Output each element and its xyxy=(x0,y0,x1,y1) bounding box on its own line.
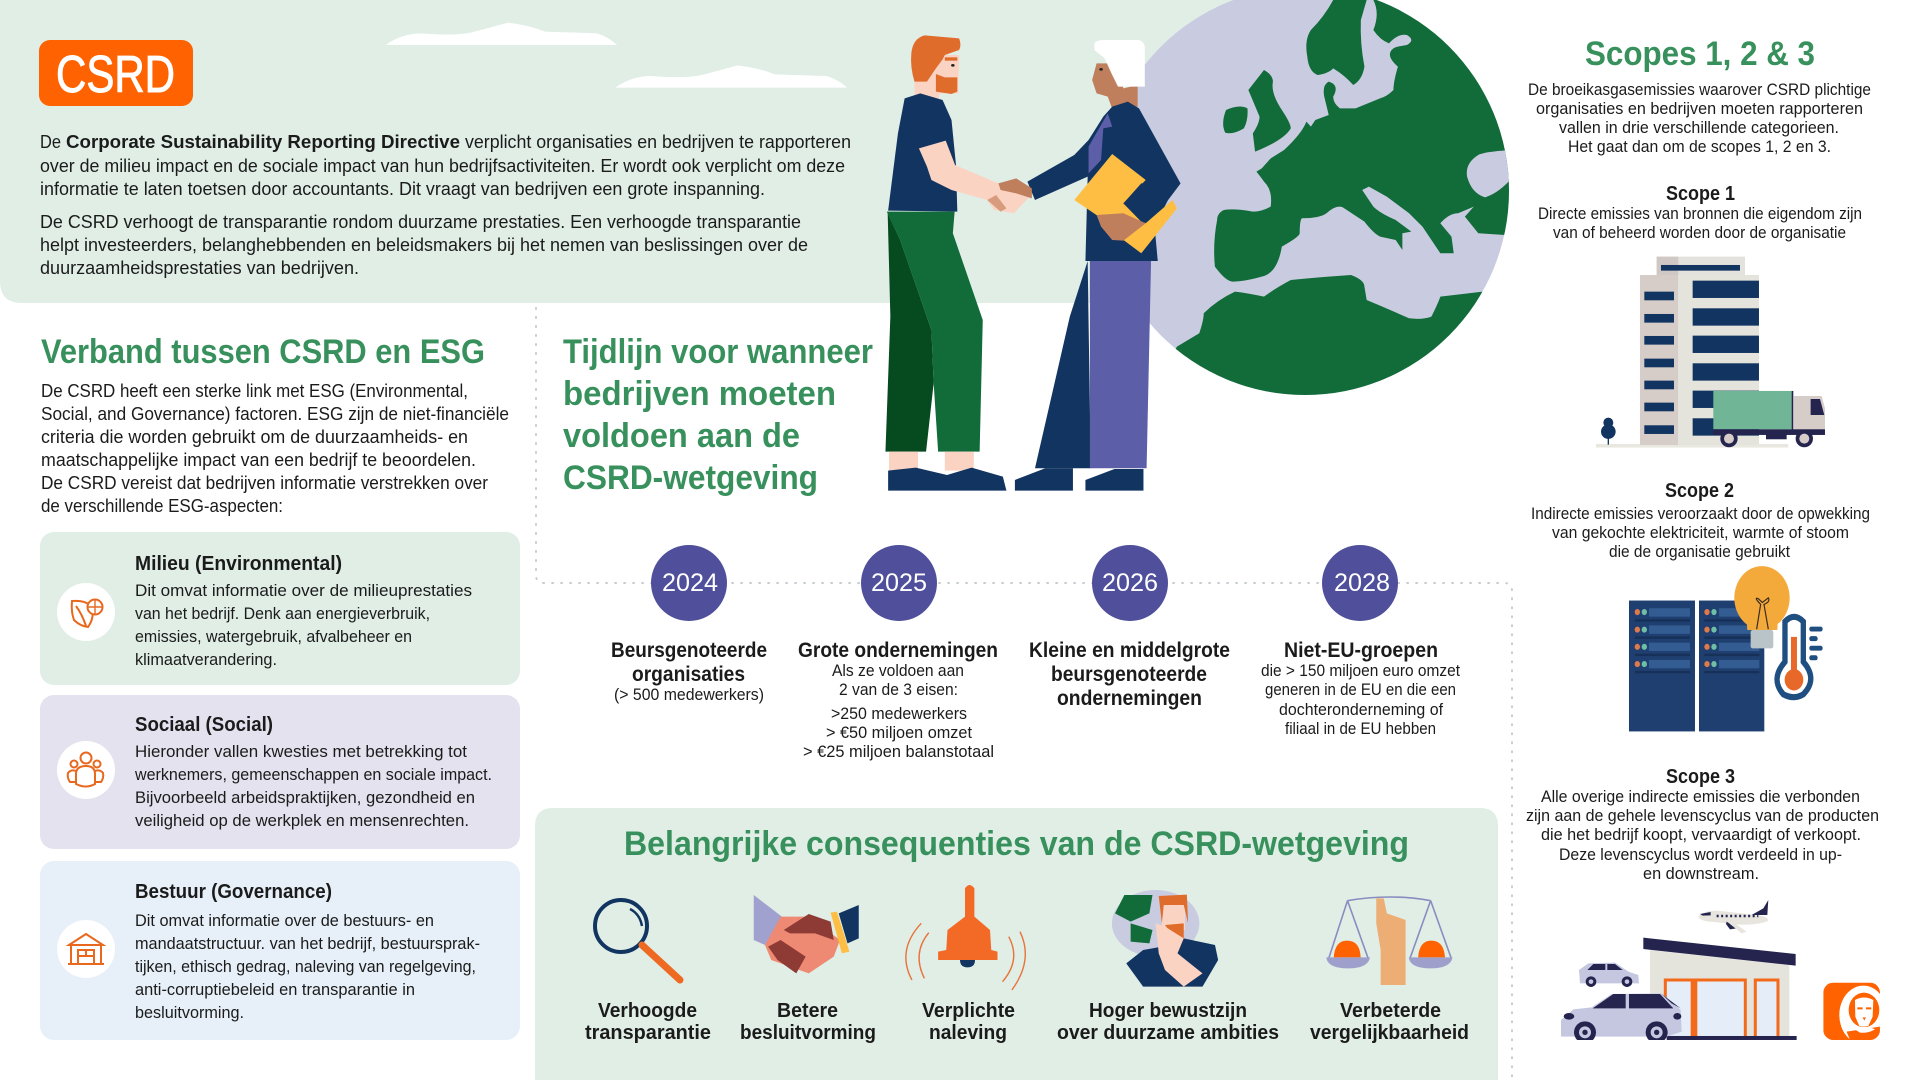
timeline item: 2026: Kleine en middelgrote xyxy=(1029,639,1230,662)
illustration: woman with folder xyxy=(987,40,1181,491)
text block: Scope 3: Deze levenscyclus wordt verdeeld in up- xyxy=(1559,846,1842,864)
timeline item: 2025: Grote ondernemingen xyxy=(798,639,998,662)
illustration: servers, bulb, thermometer xyxy=(1629,566,1823,731)
heading: Tijdlijn: CSRD-wetgeving xyxy=(563,459,818,497)
text block: scopes intro xyxy=(1528,81,1871,156)
timeline item: 2024: 2024 xyxy=(662,569,718,597)
text block: intro: duurzaamheidsprestaties van bedrijven. xyxy=(40,257,359,278)
panel: Milieu: Milieu (Environmental) xyxy=(135,553,342,575)
text block: intro: helpt investeerders, belanghebbenden en beleidsmakers bij het nemen van beslissingen over de xyxy=(40,234,808,255)
text block: scopes intro: organisaties en bedrijven moeten rapporteren xyxy=(1536,100,1863,118)
timeline item: 2026: ondernemingen xyxy=(1057,687,1202,710)
text block: Scope 3: en downstream. xyxy=(1643,865,1759,883)
illustration: building, cars and plane xyxy=(1561,900,1797,1043)
panel: Milieu: emissies, watergebruik, afvalbeheer en xyxy=(135,628,412,646)
timeline item: 2025: > €50 miljoen omzet xyxy=(826,724,972,742)
panel: Sociaal: Hieronder vallen kwesties met betrekking tot xyxy=(135,743,467,761)
timeline item: 2025: >250 medewerkers xyxy=(831,705,967,723)
text block: intro: De xyxy=(40,131,61,152)
label: Betere besluitvorming: besluitvorming xyxy=(740,1022,876,1044)
text block: Scope 3: Scope 3 xyxy=(1666,766,1735,788)
panel: Milieu: klimaatverandering. xyxy=(135,651,277,669)
text block: scopes intro: vallen in drie verschillende categorieen. xyxy=(1559,119,1839,137)
text block: Scope 1 xyxy=(1538,183,1862,242)
timeline item: 2025: > €25 miljoen balanstotaal xyxy=(803,743,994,761)
timeline item: 2024: (> 500 medewerkers) xyxy=(614,686,764,704)
text block: intro: De CSRD verhoogt de transparantie rondom duurzame prestaties. Een verhoogde transparantie xyxy=(40,211,801,232)
text block: Scope 2 xyxy=(1531,480,1870,561)
badge: CSRD: CSRD xyxy=(56,46,175,104)
panel: Sociaal: Bijvoorbeeld arbeidspraktijken, gezondheid en xyxy=(135,789,475,807)
illustration: man xyxy=(885,35,1030,491)
text block: ESG intro: maatschappelijke impact van een bedrijf te beoordelen. xyxy=(41,449,476,470)
logo: ING lion xyxy=(1823,982,1880,1040)
panel: Milieu: Dit omvat informatie over de milieuprestaties xyxy=(135,582,472,600)
timeline item: 2028: Niet-EU-groepen xyxy=(1284,639,1438,662)
timeline item: 2028: die > 150 miljoen euro omzet xyxy=(1261,662,1460,680)
text block: Scope 2: van gekochte elektriciteit, warmte of stoom xyxy=(1552,524,1849,542)
panel: Bestuur: mandaatstructuur. van het bedrijf, bestuursprak- xyxy=(135,935,480,953)
text block: intro: Corporate Sustainability Reporting Directive xyxy=(66,131,460,152)
text block: ESG intro: criteria die worden gebruikt om de duurzaamheids- en xyxy=(41,426,468,447)
panel: Sociaal: veiligheid op de werkplek en mensenrechten. xyxy=(135,812,469,830)
icon: bell xyxy=(906,885,1025,990)
icon: magnifying glass xyxy=(595,900,680,980)
label: Verbeterde vergelijkbaarheid: Verbeterde xyxy=(1340,1000,1441,1022)
icon: people xyxy=(57,741,115,799)
label: Verbeterde vergelijkbaarheid: vergelijkbaarheid xyxy=(1310,1022,1469,1044)
illustration: globe xyxy=(1130,0,1509,395)
text block: ESG intro xyxy=(41,380,509,516)
icon: handshake xyxy=(754,895,859,973)
label: Verplichte naleving xyxy=(922,1000,1015,1044)
timeline item: 2024 xyxy=(611,545,767,704)
illustration: office and truck xyxy=(1596,257,1825,448)
panel: Bestuur: Bestuur (Governance) xyxy=(135,881,332,903)
label: Betere besluitvorming: Betere xyxy=(777,1000,838,1022)
timeline item: 2024: Beursgenoteerde xyxy=(611,639,767,662)
text block: Scope 1: Scope 1 xyxy=(1666,183,1735,205)
label: Verhoogde transparantie: Verhoogde xyxy=(598,1000,697,1022)
text block: Scope 2: Indirecte emissies veroorzaakt door de opwekking xyxy=(1531,505,1870,523)
heading: consequences: Belangrijke consequenties van de CSRD-wetgeving xyxy=(624,825,1409,863)
panel: consequences xyxy=(535,808,1498,1080)
label: Hoger bewustzijn xyxy=(1057,1000,1279,1044)
dotted timeline connector xyxy=(536,308,1512,1080)
timeline item: 2026: beursgenoteerde xyxy=(1051,663,1207,686)
timeline item: 2028 xyxy=(1261,545,1460,738)
icon: building xyxy=(57,920,115,978)
text block: Scope 3: Alle overige indirecte emissies die verbonden xyxy=(1541,788,1860,806)
label: Hoger bewustzijn: over duurzame ambities xyxy=(1057,1022,1279,1044)
timeline item: 2025: Als ze voldoen aan xyxy=(832,662,964,680)
heading: Tijdlijn: voldoen aan de xyxy=(563,417,800,455)
timeline item: 2026: 2026 xyxy=(1102,569,1158,597)
text block: ESG intro: De CSRD vereist dat bedrijven informatie verstrekken over xyxy=(41,472,488,493)
text block: scopes intro: Het gaat dan om de scopes 1, 2 en 3. xyxy=(1568,138,1831,156)
heading: Tijdlijn xyxy=(563,333,873,497)
panel: Milieu xyxy=(40,532,520,685)
panel: Sociaal: werknemers, gemeenschappen en sociale impact. xyxy=(134,766,492,784)
timeline item: 2028: 2028 xyxy=(1334,569,1390,597)
text block: scopes intro: De broeikasgasemissies waarover CSRD plichtige xyxy=(1528,81,1871,99)
heading: Scopes: Scopes 1, 2 & 3 xyxy=(1585,35,1815,73)
icon: plane xyxy=(1698,900,1768,933)
panel: Bestuur: anti-corruptiebeleid en transparantie in xyxy=(135,981,415,999)
panel: Bestuur: tijken, ethisch gedrag, naleving van regelgeving, xyxy=(135,958,476,976)
text block: Scope 2: die de organisatie gebruikt xyxy=(1609,543,1790,561)
text block: ESG intro: De CSRD heeft een sterke link met ESG (Environmental, xyxy=(41,380,468,401)
label: Betere besluitvorming xyxy=(740,1000,876,1044)
icon: scales with hand xyxy=(1326,897,1452,985)
panel: Bestuur: besluitvorming. xyxy=(135,1004,244,1022)
heading: Verband tussen CSRD en ESG: Verband tussen CSRD en ESG xyxy=(41,333,485,371)
icon: large car xyxy=(1561,993,1682,1043)
text block: ESG intro: Social, and Governance) factoren. ESG zijn de niet-financiële xyxy=(41,403,509,424)
text block: Scope 3: die het bedrijf koopt, vervaardigt of verkoopt. xyxy=(1541,826,1861,844)
label: Verhoogde transparantie xyxy=(585,1000,711,1044)
label: Hoger bewustzijn: Hoger bewustzijn xyxy=(1089,1000,1247,1022)
text block: Scope 1: van of beheerd worden door de organisatie xyxy=(1553,224,1846,242)
panel: intro background xyxy=(0,0,1240,303)
clouds xyxy=(386,23,847,88)
panel: Bestuur xyxy=(40,861,520,1040)
text block: intro: verplicht organisaties en bedrijven te rapporteren xyxy=(465,131,851,152)
text block: intro: over de milieu impact en de sociale impact van hun bedrijfsactiviteiten. Er wordt ook verplicht om deze xyxy=(40,155,845,176)
heading: Tijdlijn: Tijdlijn voor wanneer xyxy=(563,333,873,371)
timeline item: 2025: 2025 xyxy=(871,569,927,597)
icon: leaf and globe xyxy=(57,583,115,641)
text block: Scope 3 xyxy=(1526,766,1879,883)
timeline item: 2028: filiaal in de EU hebben xyxy=(1285,720,1436,738)
panel: Bestuur: Dit omvat informatie over de bestuurs- en xyxy=(135,912,434,930)
label: Verplichte naleving: naleving xyxy=(929,1022,1007,1044)
timeline item: 2025 xyxy=(798,545,998,761)
icon: small car xyxy=(1579,963,1639,987)
text block: Scope 2: Scope 2 xyxy=(1665,480,1734,502)
timeline item: 2028: generen in de EU en die een xyxy=(1265,681,1456,699)
text block: ESG intro: de verschillende ESG-aspecten: xyxy=(41,495,283,516)
text block: Scope 1: Directe emissies van bronnen die eigendom zijn xyxy=(1538,205,1862,223)
label: Verbeterde vergelijkbaarheid xyxy=(1310,1000,1469,1044)
panel: Milieu: van het bedrijf. Denk aan energieverbruik, xyxy=(135,605,430,623)
label: Verhoogde transparantie: transparantie xyxy=(585,1022,711,1044)
heading: Tijdlijn: bedrijven moeten xyxy=(563,375,836,413)
label: Verplichte naleving: Verplichte xyxy=(922,1000,1015,1022)
timeline item: 2024: organisaties xyxy=(632,663,745,686)
text block: intro: informatie te laten toetsen door accountants. Dit vraagt van bedrijven een grote inspanning. xyxy=(40,178,765,199)
panel: Sociaal xyxy=(40,695,520,849)
text block: Scope 3: zijn aan de gehele levenscyclus van de producten xyxy=(1526,807,1879,825)
timeline item: 2028: dochteronderneming of xyxy=(1279,701,1443,719)
timeline item: 2026 xyxy=(1029,545,1230,710)
timeline item: 2025: 2 van de 3 eisen: xyxy=(839,681,958,699)
text block: intro xyxy=(40,131,851,278)
icon: person thinking with globe xyxy=(1112,890,1218,987)
panel: Sociaal: Sociaal (Social) xyxy=(135,714,273,736)
